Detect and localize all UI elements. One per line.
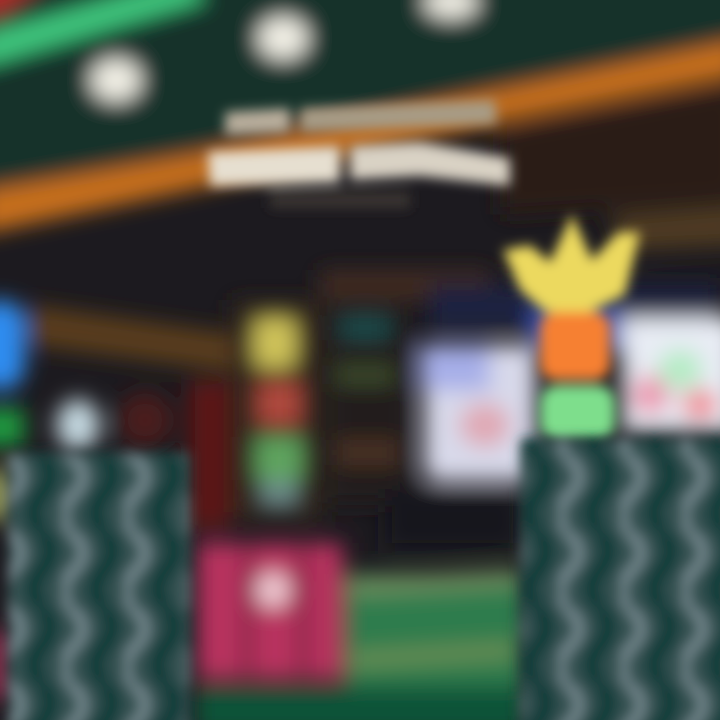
green token <box>540 385 615 441</box>
green table <box>345 574 525 688</box>
right chip stack <box>520 438 720 720</box>
bookshelf <box>330 305 410 505</box>
right bright screen <box>622 318 720 432</box>
green neon strip <box>0 0 205 66</box>
orange token <box>540 312 610 380</box>
pink box <box>197 543 343 679</box>
mid left brown beam <box>30 305 240 372</box>
green sign <box>0 408 24 446</box>
centre brown beam <box>320 270 490 300</box>
heading sub line <box>270 192 410 208</box>
brown pillar <box>232 300 322 520</box>
shelf brown row <box>335 440 400 465</box>
right screen red blob <box>682 389 718 421</box>
screen pink tint <box>460 403 510 447</box>
table gold line lower <box>350 642 515 668</box>
shelf green row <box>340 315 390 340</box>
left edge pink <box>0 630 8 700</box>
ceiling light left <box>91 59 141 101</box>
orange ceiling beam <box>0 40 720 234</box>
ceiling panel <box>0 0 720 195</box>
left edge yellow <box>0 470 10 520</box>
ceiling light centre <box>258 17 308 59</box>
screen gap blue <box>530 310 622 352</box>
heading upper line left <box>225 108 290 135</box>
left chip stack <box>8 452 190 720</box>
table gold line <box>350 570 520 596</box>
red corner accent <box>0 0 45 16</box>
pink box band right <box>296 545 310 675</box>
heading main line left <box>208 146 340 186</box>
dark green floor <box>195 686 525 720</box>
shelf olive row <box>335 365 395 385</box>
screen blue tint <box>420 345 490 390</box>
red curtain <box>188 380 230 530</box>
dark navy wall right <box>430 285 720 330</box>
pillar yellow section <box>254 318 296 368</box>
brown band under beam <box>500 84 720 215</box>
pillar pale base <box>262 480 296 504</box>
heading upper line right <box>300 100 497 132</box>
pillar green section <box>256 437 302 480</box>
ceiling light right <box>424 0 478 18</box>
pink box emblem <box>256 572 290 608</box>
right screen pink blob <box>630 375 670 415</box>
upper right brown beam <box>610 205 720 250</box>
left bright screen <box>424 345 536 481</box>
blue sign <box>0 300 25 390</box>
right screen green blob <box>658 350 702 390</box>
pillar red section <box>258 382 300 425</box>
pale round light <box>56 399 100 451</box>
crown icon <box>503 214 640 312</box>
pink box band left <box>240 545 254 675</box>
heading main line right <box>350 142 510 186</box>
blurred heading block <box>208 100 510 208</box>
dim red lamp <box>117 392 173 448</box>
dark figures row <box>385 490 520 550</box>
